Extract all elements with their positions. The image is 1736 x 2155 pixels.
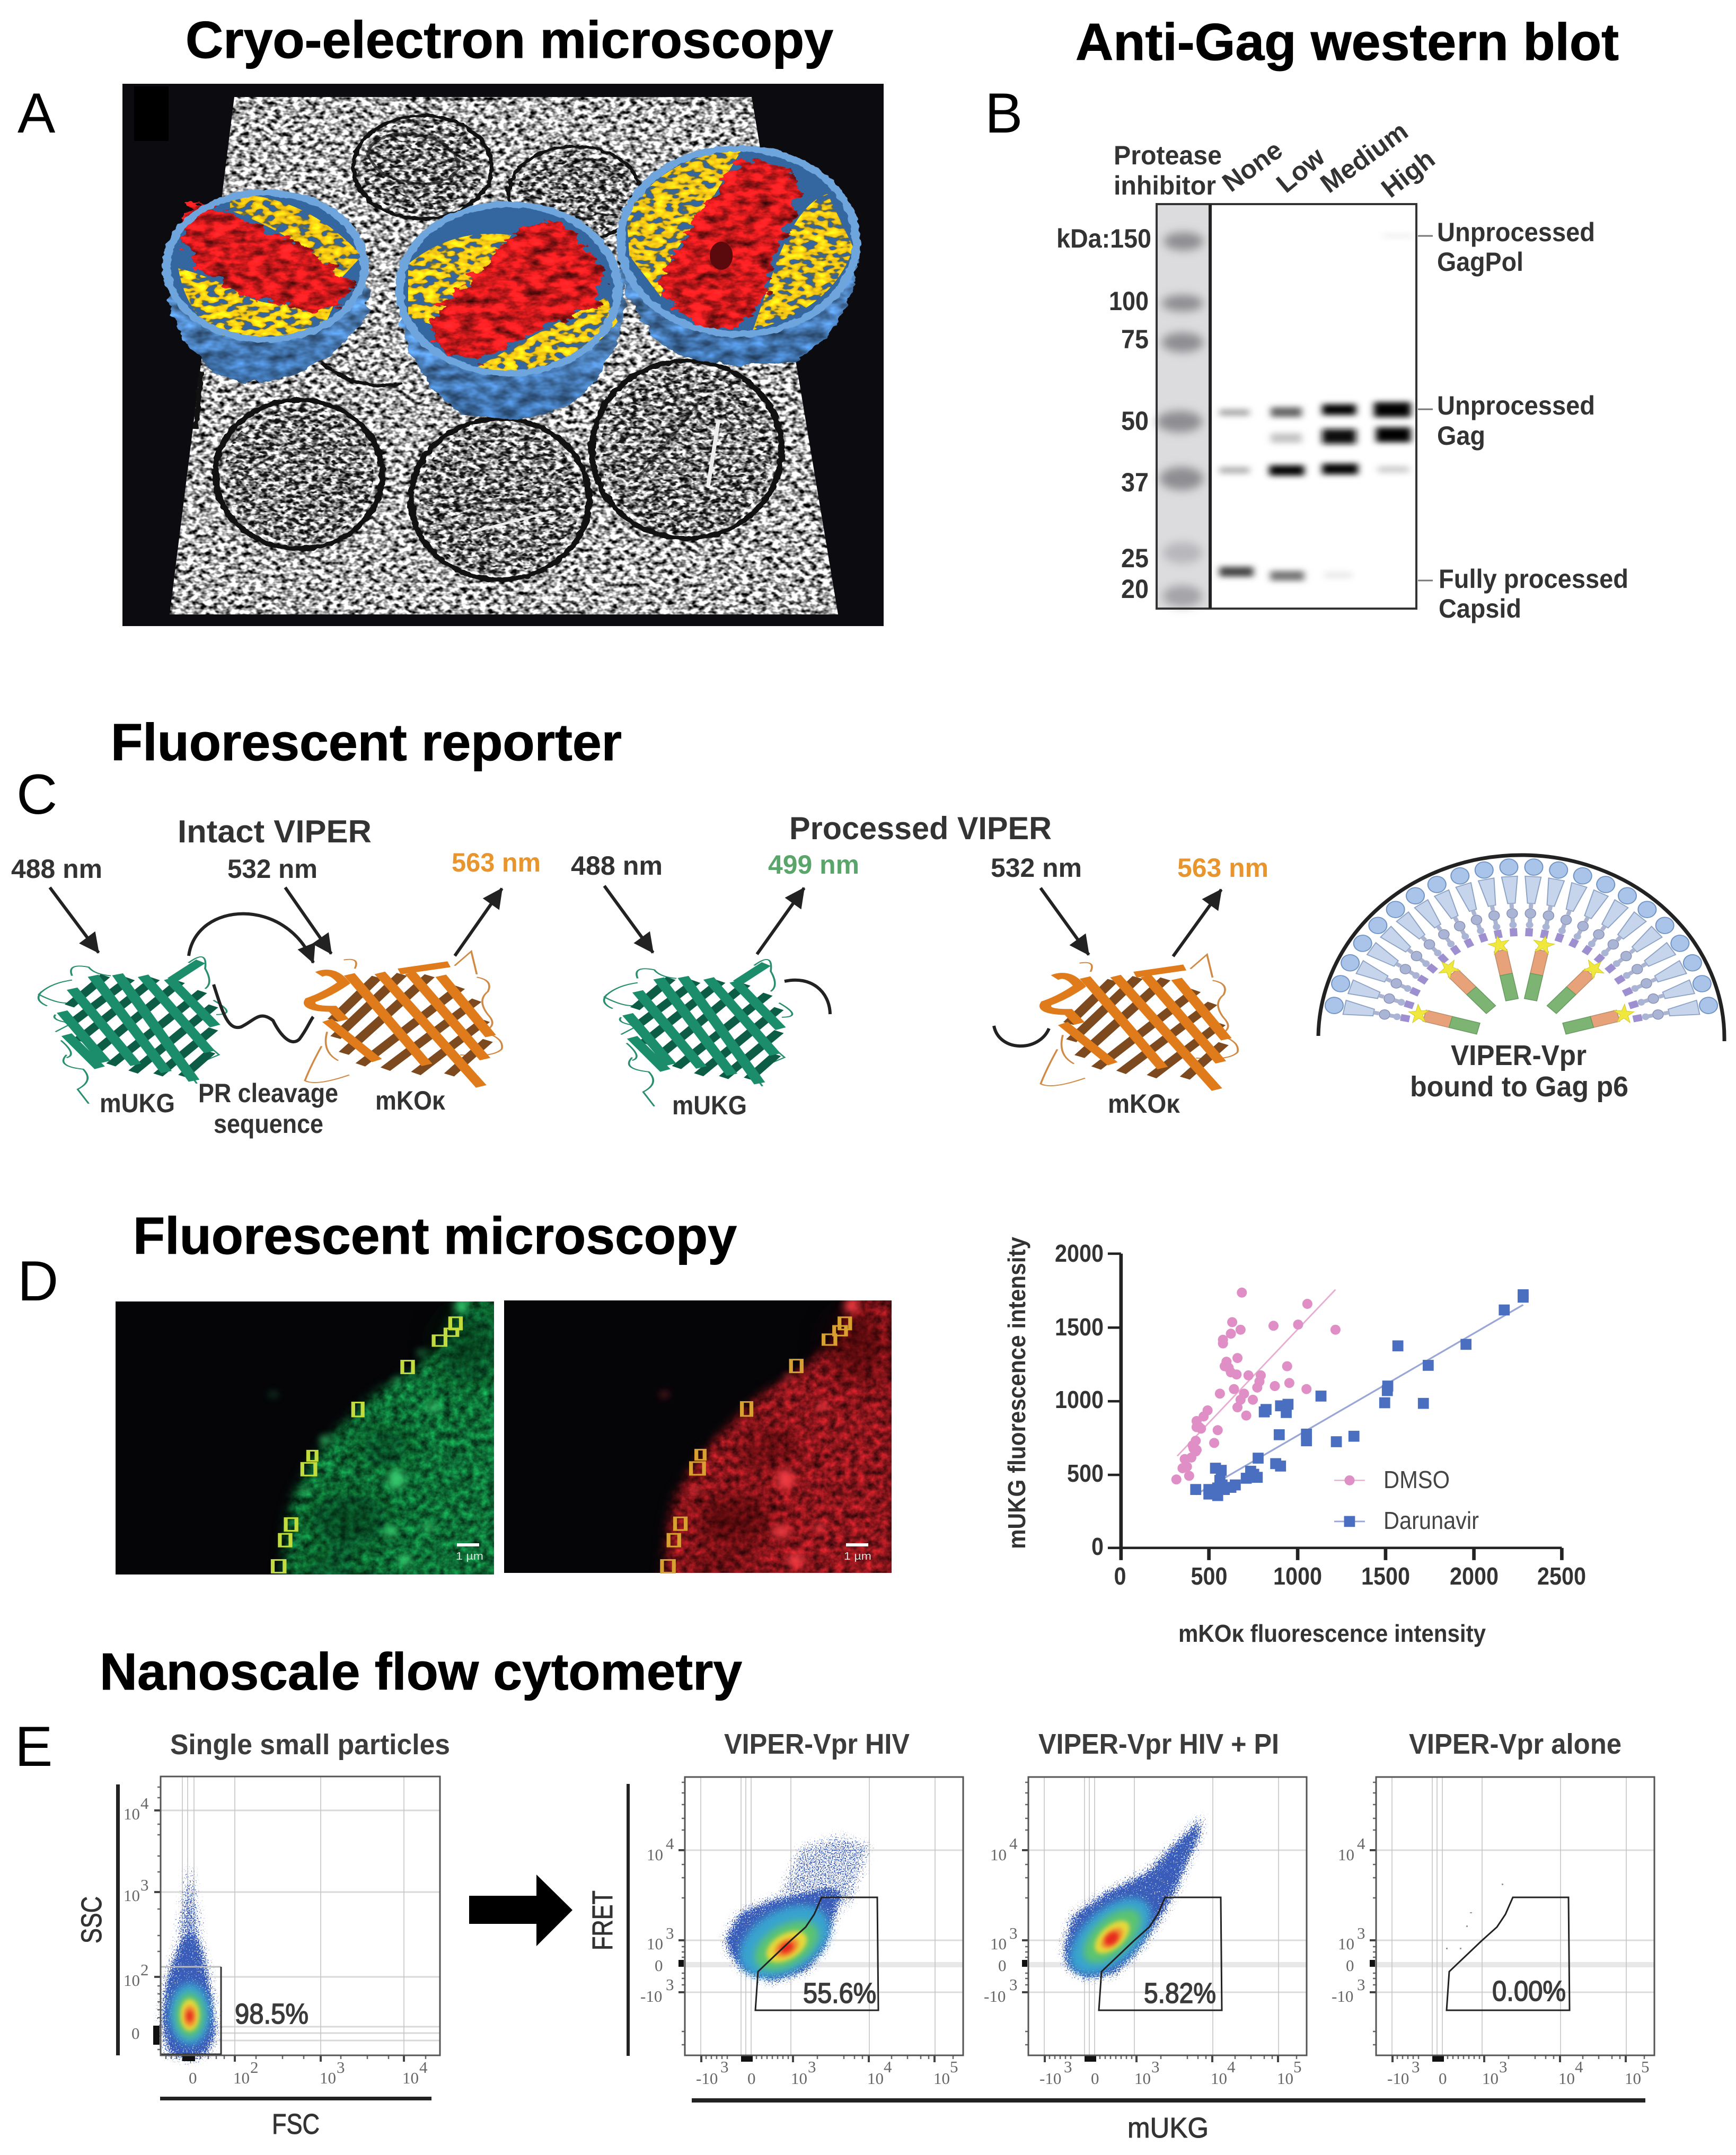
axis tick labels: 2 (250, 2058, 259, 2077)
legend labels: Darunavir (1383, 1507, 1479, 1534)
x axis tick labels: 2500 (1537, 1562, 1586, 1590)
wavelength labels (571, 850, 1268, 883)
molecular weight labels (1056, 224, 1151, 604)
gate (1099, 1897, 1222, 2010)
axis tick labels: 10 (933, 2069, 950, 2088)
DMSO regression line (1177, 1290, 1335, 1456)
axis tick labels: 10 (1211, 2069, 1227, 2088)
panel B: anti-Gag western blot (985, 13, 1628, 623)
title: anti-Gag western blot: Anti-Gag western blot (1076, 13, 1619, 71)
cleaved linker on mUKG (785, 980, 830, 1014)
axis tick labels: 3 (808, 2057, 816, 2076)
heading: processed VIPER: Processed VIPER (789, 811, 1052, 846)
axis tick labels: 10 (1625, 2069, 1641, 2088)
axis tick labels: -10 (640, 1987, 662, 2006)
green channel micrograph (116, 1294, 509, 1584)
lane labels (1217, 116, 1440, 204)
axis tick labels: 2 (140, 1960, 148, 1979)
axis tick labels: 0 (998, 1956, 1006, 1975)
wavelength labels: 499 nm (768, 850, 859, 879)
x axis tick labels: 1000 (1273, 1562, 1322, 1590)
axis tick labels: 4 (419, 2058, 428, 2077)
axis tick labels: 3 (666, 1975, 674, 1994)
molecular weight labels: 50 (1121, 406, 1149, 436)
axis tick labels: 10 (124, 1886, 140, 1905)
band annotations: GagPol (1437, 247, 1523, 277)
virion centre (400, 204, 623, 419)
band annotations: Capsid (1439, 594, 1521, 623)
density scatter (162, 1864, 216, 2060)
tomogram image with rendered virions (122, 84, 884, 626)
lane labels: Low (1271, 142, 1330, 198)
axis tick labels: 10 (124, 1971, 140, 1990)
axis tick labels: 3 (140, 1876, 148, 1894)
schematic: VIPER-Vpr bound to Gag p6 (1318, 855, 1724, 1103)
virion left (164, 192, 368, 382)
axis tick labels: 3 (1412, 2057, 1420, 2076)
scale bar green: 1 µm (456, 1551, 483, 1562)
scale bar red (844, 1543, 871, 1562)
protein: mKO kappa processed (1041, 955, 1238, 1089)
density scatter (1056, 1817, 1203, 1989)
gate top edge (161, 1966, 221, 1968)
lane labels: High (1376, 144, 1440, 204)
band annotations: Fully processed (1439, 564, 1628, 594)
legend symbols (1334, 1475, 1365, 1527)
ticks (154, 1810, 404, 2062)
molecular weight labels: 100 (1109, 286, 1149, 316)
excitation and emission arrows (50, 887, 502, 963)
axis tick labels: 3 (1357, 1975, 1365, 1994)
x axis tick labels (1114, 1562, 1586, 1590)
y axis title: mUKG fluorescence intensity (1003, 1237, 1030, 1549)
panel A: cryo-electron microscopy (17, 11, 884, 626)
axis tick labels: 10 (1558, 2069, 1575, 2088)
mUKG axis bar and label (692, 2098, 1645, 2144)
protein labels: mKOκ (1108, 1089, 1180, 1119)
axis tick labels: 0 (1091, 2069, 1099, 2088)
gate percentage: 0.00% (1492, 1975, 1566, 2007)
molecular weight labels: 75 (1121, 324, 1149, 354)
molecular weight labels: 37 (1121, 468, 1149, 497)
axes and gridlines (1022, 1777, 1307, 2062)
axis tick labels: 4 (1575, 2057, 1583, 2076)
title: fluorescent microscopy: Fluorescent microscopy (133, 1207, 737, 1265)
x axis title: mKOκ fluorescence intensity (1178, 1620, 1486, 1647)
heading: intact VIPER: Intact VIPER (178, 814, 372, 849)
schematic caption (1410, 1040, 1628, 1103)
protein: mKO kappa (305, 952, 502, 1086)
axis tick labels: 3 (666, 1924, 674, 1942)
panel letter B: B (985, 81, 1023, 145)
lane header: protease inhibitor: Protease (1114, 140, 1222, 170)
axis tick labels: 0 (189, 2069, 197, 2087)
lane header: protease inhibitor (1114, 140, 1222, 200)
protein labels: PR cleavage (198, 1078, 338, 1108)
title: fluorescent reporter: Fluorescent reporter (111, 713, 622, 771)
axis tick labels: 10 (320, 2069, 336, 2087)
axis tick labels: 4 (1009, 1834, 1018, 1853)
processed VIPER diagram (571, 811, 1268, 1120)
plot heading: VIPER-Vpr alone (1409, 1728, 1622, 1760)
wavelength labels: 532 nm (991, 853, 1082, 883)
Gag lattice (1324, 858, 1719, 1038)
density scatter (725, 1835, 870, 1992)
panel letter A: A (17, 81, 56, 145)
axis tick labels: 4 (666, 1834, 674, 1853)
gate percentage: 55.6% (803, 1977, 876, 2009)
y axis tick labels: 1000 (1055, 1386, 1104, 1413)
y axis tick labels: 1500 (1055, 1313, 1104, 1341)
axis tick labels: -10 (1387, 2069, 1409, 2088)
FSC axis bar and label (160, 2097, 431, 2140)
excitation and emission arrows (604, 886, 1221, 956)
axis tick labels: -10 (1039, 2069, 1061, 2088)
plot: VIPER-Vpr HIV + PI (984, 1728, 1307, 2088)
axis tick labels: 0 (1439, 2069, 1447, 2088)
axis tick labels: 3 (1499, 2057, 1508, 2076)
gate percentage: 98.5% (235, 1998, 309, 2030)
axis tick labels: 0 (131, 2024, 140, 2043)
axis tick labels: 0 (1346, 1956, 1354, 1975)
axis tick labels: 4 (1227, 2057, 1236, 2076)
axis tick labels: 10 (1338, 1934, 1354, 1953)
gate percentage: 5.82% (1144, 1977, 1216, 2009)
protein: mUKG (39, 957, 227, 1104)
plot: VIPER-Vpr HIV (640, 1728, 963, 2088)
protein labels: sequence (214, 1109, 323, 1139)
axis tick labels: 4 (140, 1794, 149, 1813)
title: cryo-electron microscopy: Cryo-electron microscopy (186, 11, 833, 69)
axis tick labels: 3 (1151, 2057, 1160, 2076)
schematic caption: bound to Gag p6 (1410, 1071, 1628, 1103)
band annotations: Unprocessed (1437, 217, 1595, 247)
panel D: fluorescent microscopy (17, 1207, 1586, 1647)
intact VIPER diagram (11, 814, 541, 1139)
plot: single small particles (76, 1729, 450, 2140)
gate right edge (161, 1967, 221, 2054)
ladder bands (1157, 232, 1203, 607)
x axis tick labels: 500 (1191, 1562, 1228, 1590)
wavelength labels (11, 848, 541, 884)
axis tick labels: 3 (1009, 1924, 1018, 1942)
x axis tick labels: 1500 (1361, 1562, 1410, 1590)
axis tick labels: 0 (655, 1956, 663, 1975)
axis tick labels: 3 (720, 2057, 728, 2076)
plot heading: Single small particles (170, 1729, 450, 1761)
axis tick labels: 10 (990, 1934, 1007, 1953)
molecular weight labels: kDa:150 (1056, 224, 1151, 253)
axis tick labels: -10 (1332, 1987, 1353, 2006)
protein labels (672, 1089, 1180, 1120)
cleaved linker on mKO kappa (994, 1026, 1049, 1046)
plot heading: VIPER-Vpr HIV + PI (1038, 1728, 1279, 1760)
axis tick labels: 0 (747, 2069, 756, 2088)
axis tick labels: 10 (402, 2069, 419, 2087)
FSC axis bar and label: FSC (272, 2108, 320, 2140)
panel letter C: C (16, 762, 57, 826)
plot heading: VIPER-Vpr HIV (724, 1728, 910, 1760)
plot: VIPER-Vpr alone (1332, 1728, 1654, 2088)
molecular weight labels: 25 (1121, 543, 1149, 573)
region-of-interest boxes red (662, 1317, 850, 1572)
legend labels: DMSO (1383, 1466, 1450, 1493)
band annotations: Unprocessed (1437, 391, 1595, 420)
axis tick labels: -10 (984, 1987, 1006, 2006)
panel E: nanoscale flow cytometry (15, 1642, 1654, 2144)
legend labels (1383, 1466, 1479, 1534)
axis tick labels: -10 (696, 2069, 718, 2088)
axis tick labels: 5 (1293, 2057, 1302, 2076)
x axis tick labels: 2000 (1450, 1562, 1499, 1590)
y axis tick labels: 2000 (1055, 1239, 1104, 1267)
wavelength labels: 488 nm (571, 851, 663, 881)
mUKG axis bar and label: mUKG (1127, 2112, 1209, 2144)
Darunavir regression line (1196, 1305, 1523, 1494)
axis tick labels: 10 (867, 2069, 884, 2088)
blot image (1157, 204, 1416, 609)
virion membrane arc (1318, 855, 1724, 1041)
scale bar green (456, 1543, 483, 1562)
axis tick labels: 10 (1482, 2069, 1499, 2088)
sparse events (1446, 1884, 1503, 1949)
axis tick labels: 10 (647, 1934, 663, 1953)
SSC axis bar and label (76, 1784, 120, 2055)
axis tick labels: 5 (950, 2057, 958, 2076)
Darunavir points (1190, 1289, 1529, 1501)
panel C: fluorescent reporter (11, 713, 1724, 1139)
axis tick labels: 4 (1357, 1834, 1365, 1853)
red channel micrograph (504, 1294, 899, 1584)
band annotations: Gag (1437, 421, 1485, 451)
lane header: protease inhibitor: inhibitor (1114, 171, 1216, 200)
region-of-interest boxes green (273, 1317, 461, 1572)
protein labels: mKOκ (375, 1086, 445, 1115)
molecular weight labels: 20 (1121, 574, 1149, 604)
FRET axis bar and label: FRET (587, 1890, 619, 1950)
y axis tick labels (1055, 1239, 1104, 1560)
axis tick labels: 3 (337, 2058, 345, 2077)
axes (1108, 1254, 1562, 1560)
x axis tick labels: 0 (1114, 1562, 1126, 1590)
axis tick labels: 10 (1134, 2069, 1151, 2088)
axis tick labels: 10 (990, 1845, 1007, 1864)
axes and gridlines (1370, 1777, 1654, 2062)
axis tick labels: 10 (233, 2069, 250, 2087)
axis tick labels: 4 (884, 2057, 892, 2076)
wavelength labels: 488 nm (11, 854, 102, 884)
y axis tick labels: 500 (1067, 1459, 1104, 1487)
protein: mUKG processed (604, 960, 792, 1106)
FRET axis bar and label (587, 1784, 630, 2056)
protein labels: mUKG (672, 1090, 747, 1120)
axes and gridlines (678, 1777, 963, 2062)
wavelength labels: 563 nm (1177, 853, 1268, 883)
axis tick labels (640, 1834, 958, 2088)
scale bar red: 1 µm (844, 1551, 871, 1562)
lane labels: Medium (1315, 116, 1413, 199)
SSC axis bar and label: SSC (76, 1896, 108, 1943)
title: nanoscale flow cytometry: Nanoscale flow cytometry (100, 1642, 742, 1701)
axis tick labels: 10 (1277, 2069, 1293, 2088)
axis tick labels (1332, 1834, 1650, 2088)
wavelength labels: 563 nm (452, 848, 541, 877)
virion right (620, 148, 858, 366)
scatter chart: mUKG vs mKO kappa (1003, 1237, 1586, 1647)
y axis tick labels: 0 (1091, 1533, 1104, 1560)
axis tick labels: 10 (791, 2069, 807, 2088)
protein labels: mUKG (100, 1088, 175, 1118)
axis tick labels: 3 (1357, 1924, 1365, 1942)
axis tick labels: 3 (1009, 1975, 1018, 1994)
lane labels: None (1217, 135, 1288, 198)
axis tick labels: 10 (647, 1845, 663, 1864)
gate (1447, 1897, 1570, 2010)
band annotations (1418, 217, 1628, 623)
arrow between plots (469, 1875, 572, 1946)
panel letter E: E (15, 1714, 52, 1778)
linker: PR cleavage sequence (214, 984, 313, 1042)
axis tick labels (984, 1834, 1302, 2088)
axis tick labels: 10 (1338, 1845, 1354, 1864)
schematic caption: VIPER-Vpr (1451, 1040, 1587, 1071)
gridlines (161, 1810, 440, 2040)
wavelength labels: 532 nm (227, 854, 318, 884)
axis tick labels: 10 (124, 1805, 140, 1823)
sample bands (1219, 234, 1413, 581)
axis tick labels: 5 (1641, 2057, 1650, 2076)
panel letter D: D (17, 1249, 58, 1313)
axis tick labels: 3 (1064, 2057, 1072, 2076)
gate (755, 1897, 878, 2010)
DMSO points (1171, 1288, 1341, 1484)
axis tick labels (124, 1794, 428, 2087)
protein labels (100, 1078, 445, 1139)
